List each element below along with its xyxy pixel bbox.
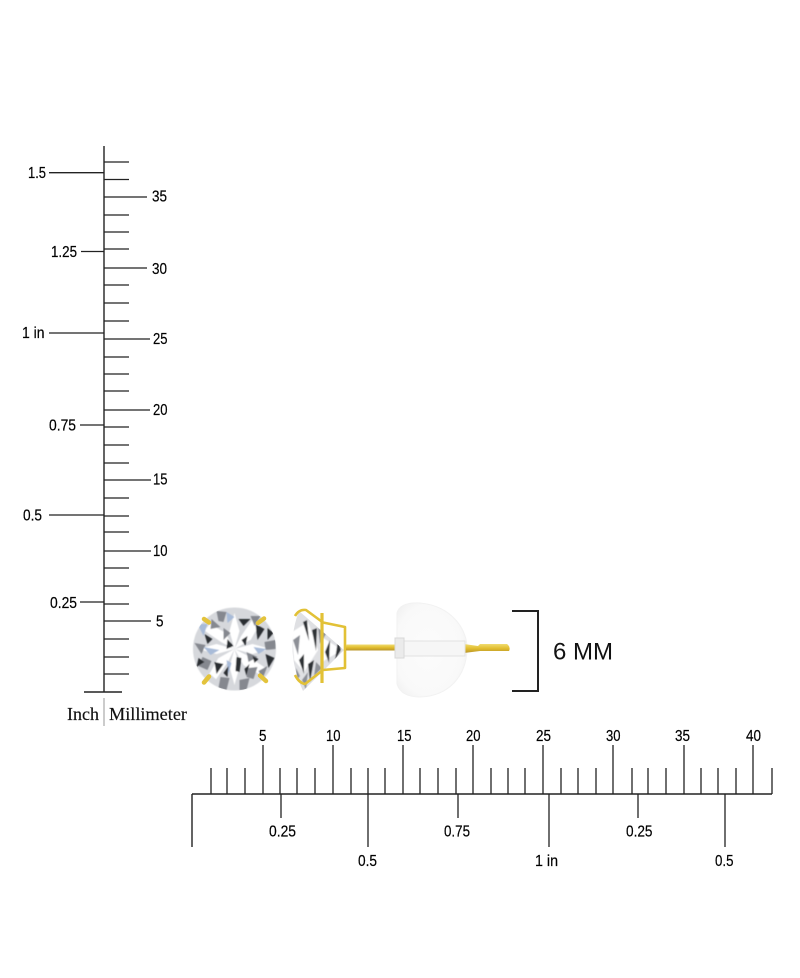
millimeter labels: 35 — [675, 728, 690, 745]
millimeter labels: 30 — [152, 261, 167, 278]
millimeter labels: 40 — [746, 728, 761, 745]
icon: diamond earring side view — [292, 608, 346, 691]
unit captions: Inch and Millimeter: Inch — [67, 704, 99, 724]
inch labels — [269, 824, 734, 870]
inch labels — [22, 165, 77, 612]
millimeter labels: 35 — [152, 188, 167, 206]
icon: silicone earring back with gold post — [346, 603, 510, 697]
silicone dome — [397, 603, 467, 697]
inch labels: 0.75 — [49, 418, 76, 434]
millimeter labels: 20 — [466, 728, 481, 745]
millimeter labels — [259, 728, 761, 745]
unit captions: Inch and Millimeter: Millimeter — [109, 704, 187, 724]
inch labels: 0.5 — [715, 853, 734, 870]
inch labels: 0.5 — [23, 508, 42, 524]
size bracket — [512, 611, 538, 691]
inch labels: 0.25 — [269, 824, 296, 840]
gold setting post — [320, 613, 324, 683]
inch labels: 1.5 — [28, 165, 46, 182]
size label: 6 MM: 6 MM — [553, 638, 613, 666]
post tip — [464, 644, 510, 653]
gold prongs — [204, 618, 266, 682]
unit captions: Inch and Millimeter — [67, 698, 187, 726]
inch labels: 0.25 — [50, 595, 77, 612]
millimeter labels: 5 — [259, 728, 267, 745]
icon: diamond earring front view — [193, 608, 276, 690]
millimeter labels — [152, 188, 168, 630]
millimeter labels: 10 — [153, 543, 168, 560]
millimeter labels: 20 — [153, 402, 168, 419]
vertical ruler — [22, 146, 187, 726]
millimeter labels: 10 — [326, 728, 341, 745]
millimeter labels: 30 — [606, 728, 621, 745]
inch labels: 0.5 — [358, 853, 377, 870]
vertical ruler axis and base — [84, 146, 122, 692]
inch labels: 0.75 — [444, 824, 470, 840]
millimeter labels: 15 — [397, 728, 412, 745]
horizontal ruler axis — [192, 794, 772, 847]
millimeter labels: 25 — [153, 331, 168, 348]
gold post — [346, 644, 396, 650]
vertical inch ticks — [49, 173, 104, 602]
inch labels: 1 in — [22, 325, 44, 342]
horizontal millimeter ticks — [211, 745, 772, 794]
stone in profile — [292, 612, 344, 691]
inch labels: 1 in — [535, 853, 558, 870]
millimeter labels: 25 — [536, 728, 551, 745]
millimeter labels: 15 — [153, 472, 168, 488]
inch labels: 0.25 — [626, 824, 653, 840]
gold setting frame — [295, 610, 345, 684]
millimeter labels: 5 — [156, 614, 164, 630]
horizontal ruler — [192, 728, 772, 870]
horizontal inch ticks — [281, 794, 725, 847]
inch labels: 1.25 — [51, 244, 77, 261]
clutch tube — [395, 641, 465, 656]
vertical millimeter ticks — [104, 162, 151, 674]
